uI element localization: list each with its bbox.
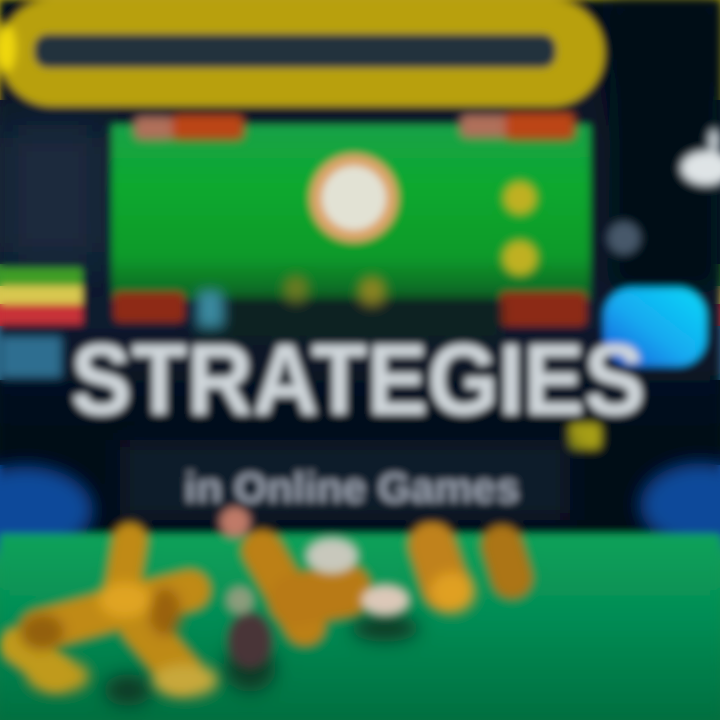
yellow pill banner bbox=[0, 0, 604, 106]
pill left highlight bbox=[0, 24, 16, 72]
pill inner bar bbox=[34, 34, 556, 68]
yellow dot upper bbox=[503, 181, 537, 215]
chip shadows bbox=[104, 614, 419, 706]
right grey dot bbox=[607, 221, 641, 255]
right cyan icon bbox=[604, 288, 706, 366]
left flag icon bbox=[0, 268, 82, 324]
subtitle: in Online Games bbox=[184, 464, 520, 511]
board corner: top left red bbox=[134, 114, 244, 140]
board corner: top right red bbox=[460, 112, 575, 140]
board corner: bottom right red bbox=[500, 292, 586, 326]
gold pieces middle bbox=[262, 545, 512, 625]
gold pieces left bbox=[18, 540, 190, 672]
pill outer ring bbox=[0, 0, 604, 106]
gold highlight right bbox=[430, 572, 474, 612]
center ring bbox=[310, 154, 398, 242]
yellow dot lower bbox=[502, 240, 538, 276]
title: STRATEGIES bbox=[71, 324, 645, 436]
pale pieces bbox=[219, 506, 409, 668]
blue mounds bbox=[0, 463, 720, 554]
top right white shape bbox=[680, 128, 720, 186]
small yellow chip bbox=[568, 422, 602, 450]
green floor bbox=[0, 534, 720, 720]
board corner: bottom left red bbox=[114, 292, 184, 322]
green game board panel bbox=[112, 112, 590, 340]
left blue strip bbox=[0, 336, 62, 378]
title backdrop bbox=[120, 440, 570, 520]
gold chips pile bbox=[18, 506, 512, 706]
board bottom pieces bbox=[195, 275, 500, 340]
gold highlights left bbox=[20, 582, 217, 696]
